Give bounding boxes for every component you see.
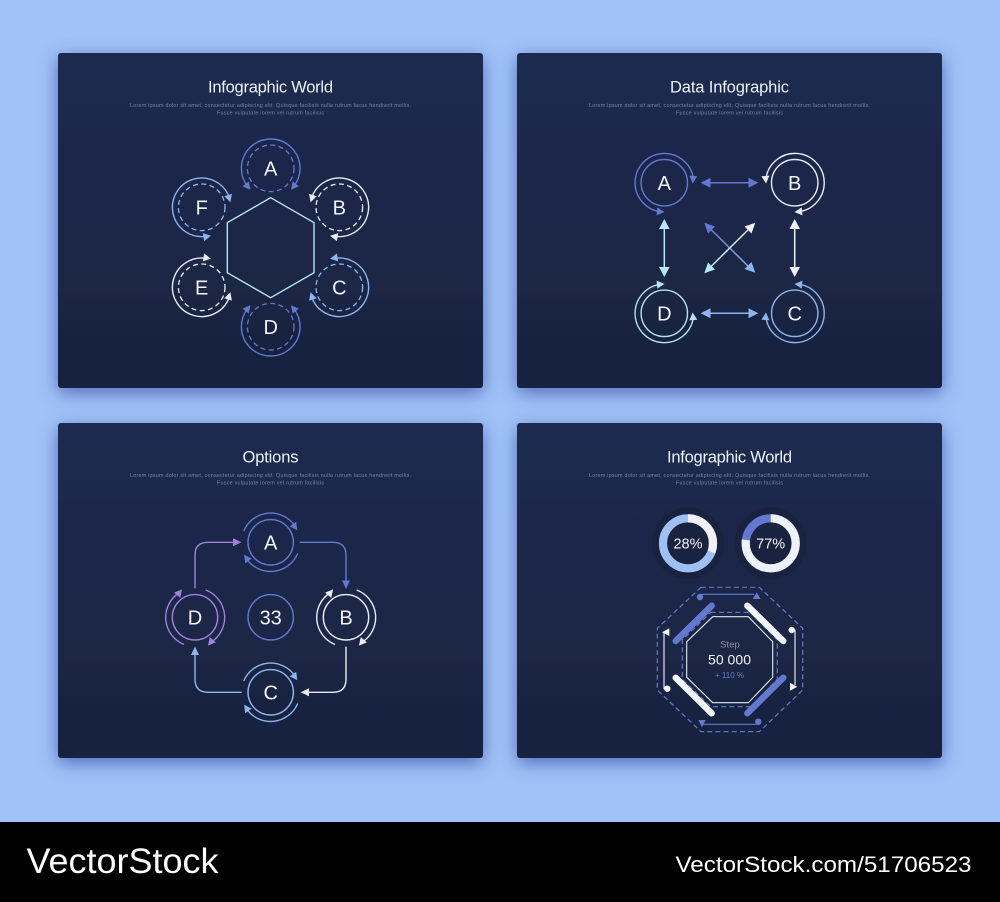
heading: Infographic World: [208, 78, 333, 96]
node B: [761, 153, 824, 216]
panel: four-node network: [517, 53, 942, 388]
node D: D: [657, 304, 672, 326]
diagonal arrow: A to C: [704, 223, 755, 273]
connector: A to B: [300, 542, 350, 589]
node A: [241, 139, 300, 192]
description text: Lorem ipsum dolor sit amet, consectetur adipiscing elit. Quisque facilisis nulla rutrum lacus hendrerit mollis.: [589, 473, 870, 479]
thick segments: [676, 606, 783, 713]
diagonal arrow: B to D: [704, 223, 755, 273]
node E: E: [195, 278, 208, 300]
node B: B: [788, 173, 801, 195]
description text: Lorem ipsum dolor sit amet, consectetur adipiscing elit. Quisque facilisis nulla rutrum lacus hendrerit mollis.: [130, 473, 411, 479]
node A: A: [658, 173, 672, 195]
node F: [172, 178, 234, 241]
footer brand: VectorStock: [26, 842, 219, 881]
center value 33: [248, 595, 293, 640]
center value 33: 33: [260, 608, 282, 630]
inner dashed octagon: [682, 612, 777, 707]
panel: hexagon cycle: [58, 53, 483, 388]
node D: [635, 280, 697, 343]
node B: B: [333, 198, 346, 220]
node F: F: [196, 198, 208, 220]
donut chart 28%: 28%: [673, 536, 703, 552]
node A: [635, 153, 697, 216]
connector: B to C: [301, 647, 346, 696]
connector: C to D: [191, 646, 242, 692]
step change: + 110 %: [715, 671, 744, 680]
description text: Lorem ipsum dolor sit amet, consectetur adipiscing elit. Quisque facilisis nulla rutrum lacus hendrerit mollis.: [589, 103, 870, 109]
arrow: A to D: [659, 219, 670, 277]
step value: 50 000: [708, 652, 751, 668]
node D: [241, 303, 300, 356]
footer url: VectorStock.com/51706523: [676, 852, 972, 877]
donut chart 28%: [652, 507, 724, 579]
node E: [172, 253, 234, 317]
node D: D: [188, 608, 202, 630]
inner solid octagon: [687, 617, 773, 703]
step label: Step: [720, 640, 740, 650]
node A: A: [264, 532, 278, 554]
node C: [761, 280, 824, 343]
heading: Infographic World: [667, 448, 792, 466]
outer dashed octagon: [657, 587, 803, 732]
donut chart 77%: 77%: [756, 536, 785, 552]
description text: [130, 103, 411, 116]
node B: B: [339, 608, 353, 630]
description text: [589, 103, 870, 116]
node A: A: [264, 158, 278, 180]
arrow: B to C: [789, 219, 800, 277]
bottom arrow: [698, 718, 762, 727]
node C: C: [787, 304, 802, 326]
heading: Options: [242, 448, 298, 466]
arrow: D to C: [701, 308, 758, 318]
connector: D to A: [195, 538, 242, 588]
right arrow: [788, 627, 797, 691]
panel: options cycle: [58, 423, 483, 758]
top arrow: [697, 592, 761, 600]
node D: [166, 587, 225, 648]
footer bar: [0, 822, 1000, 902]
node B: [307, 178, 369, 241]
node C: C: [332, 278, 347, 300]
arrow: A to B: [701, 178, 758, 188]
left arrow: [662, 628, 670, 692]
node C: C: [263, 682, 278, 704]
heading: Data Infographic: [670, 78, 789, 96]
node C: [241, 663, 301, 721]
description text: Fusce vulputate lorem vel rutrum facilisis: [676, 110, 783, 116]
node D: D: [263, 317, 278, 339]
description text: [589, 473, 870, 486]
hexagon: [227, 198, 314, 298]
description text: [130, 473, 411, 486]
octagon diagram: [657, 587, 803, 732]
description text: Fusce vulputate lorem vel rutrum facilisis: [217, 480, 324, 486]
description text: Lorem ipsum dolor sit amet, consectetur adipiscing elit. Quisque facilisis nulla rutrum lacus hendrerit mollis.: [130, 103, 411, 109]
donut chart 77%: [735, 507, 807, 579]
node B: [317, 587, 376, 648]
node A: [241, 513, 301, 571]
panel: progress and octagon: [517, 423, 942, 758]
description text: Fusce vulputate lorem vel rutrum facilisis: [217, 110, 324, 116]
node C: [307, 253, 369, 317]
description text: Fusce vulputate lorem vel rutrum facilisis: [676, 480, 783, 486]
